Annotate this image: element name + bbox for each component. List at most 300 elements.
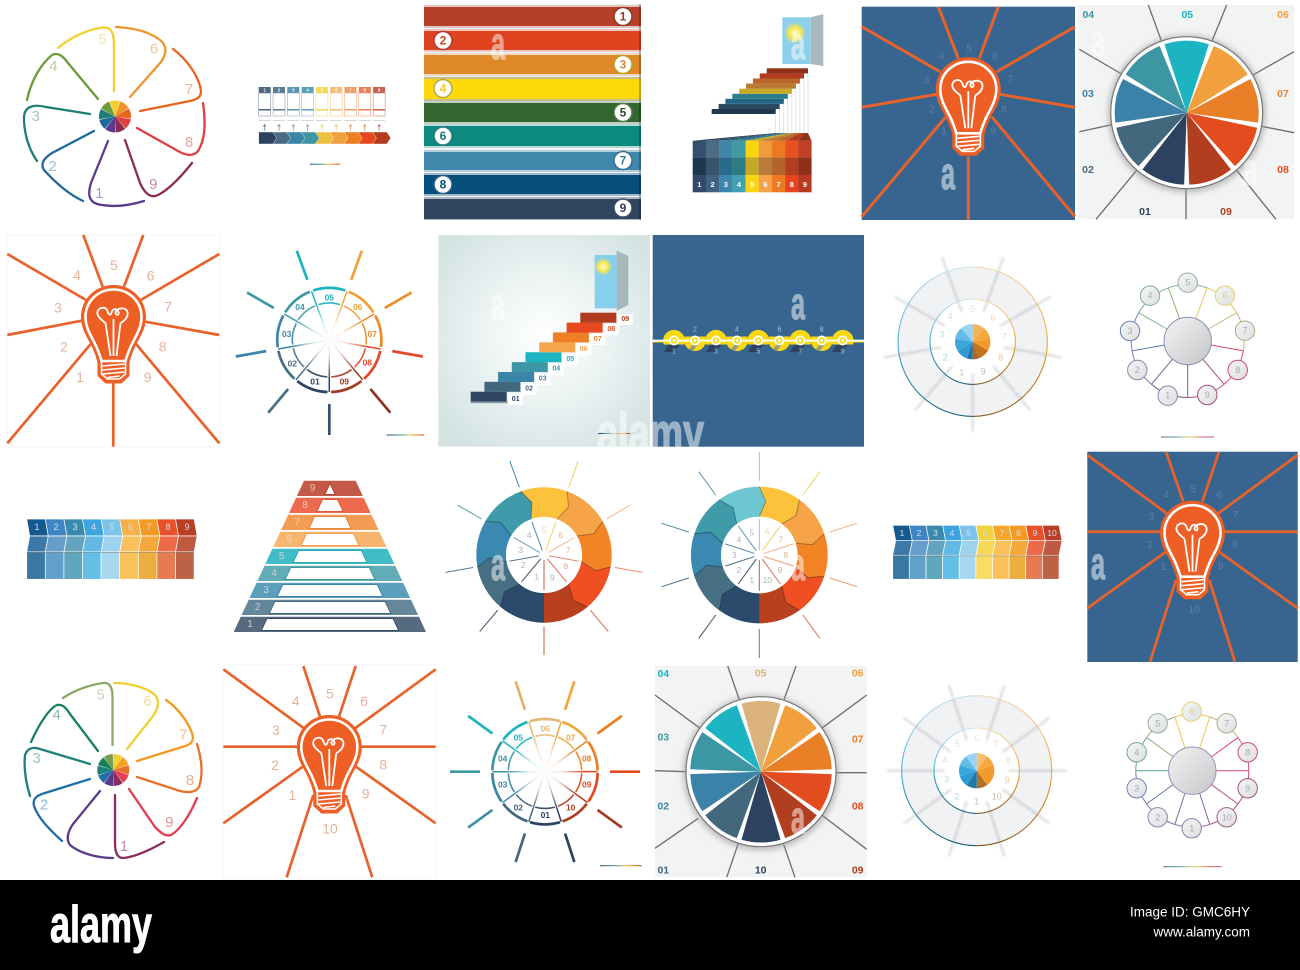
inner numbers: 4 — [527, 530, 532, 540]
ray numbers: 4 — [292, 693, 300, 709]
tab numbers: 6 — [335, 88, 338, 92]
panel: concentric circles with ten sections — [887, 685, 1067, 856]
header tabs — [259, 87, 385, 93]
section numbers: 7 — [993, 739, 999, 749]
spokes — [1133, 288, 1243, 397]
step label plates and numbers: 02 — [525, 386, 533, 392]
ray numbers: 5 — [1191, 484, 1197, 496]
layer numbers — [247, 483, 316, 630]
petal numbers: 9 — [165, 814, 173, 831]
inner numbers: 8 — [563, 561, 568, 571]
node numbers: 7 — [1224, 718, 1229, 728]
node numbers: 5 — [1185, 278, 1190, 288]
bead numbers: 5 — [756, 348, 760, 356]
petal outlines — [25, 683, 201, 858]
column numbers: 9 — [184, 522, 190, 532]
sector arcs — [275, 288, 383, 395]
ray numbers: 10 — [1188, 604, 1200, 616]
step label plates and numbers: 06 — [580, 346, 588, 353]
corner labels: 07 — [1277, 88, 1289, 100]
corner labels: 01 — [657, 865, 669, 877]
step label plates and numbers: 04 — [552, 366, 560, 372]
petal outlines — [24, 27, 205, 206]
corner labels — [657, 667, 864, 877]
inner white disc — [506, 517, 582, 593]
ring arcs — [1113, 692, 1271, 850]
panel: blue background with beaded timeline — [653, 235, 864, 447]
number badges — [434, 8, 632, 217]
watermark letters: a — [791, 18, 806, 69]
corner labels: 03 — [1082, 88, 1094, 100]
bead discs — [663, 330, 854, 351]
inner numbers — [732, 527, 788, 585]
tab numbers: 8 — [364, 88, 367, 92]
petal numbers: 4 — [49, 58, 57, 75]
pale radial background — [438, 235, 650, 447]
inner numbers: 5 — [749, 528, 754, 538]
ring outlines — [898, 267, 1047, 416]
sun — [594, 258, 612, 276]
tab numbers: 7 — [349, 88, 352, 92]
block numbers: 4 — [737, 180, 742, 189]
watermark letters: a — [1091, 538, 1106, 589]
legend line — [387, 434, 424, 436]
block numbers: 5 — [750, 180, 754, 189]
panel: pyramid with nine layers — [234, 481, 426, 632]
sector labels: 02 — [288, 358, 297, 368]
node numbers: 5 — [1155, 718, 1160, 728]
node numbers: 10 — [1222, 812, 1232, 822]
section numbers: 6 — [990, 312, 996, 322]
sector labels: 05 — [514, 732, 523, 742]
inner numbers: 4 — [737, 534, 742, 544]
ray numbers: 6 — [1217, 490, 1223, 501]
ray numbers: 8 — [1232, 540, 1238, 551]
badge numbers: 4 — [440, 82, 447, 96]
ray numbers: 8 — [1001, 104, 1007, 116]
corner labels: 08 — [1277, 164, 1289, 176]
hanging stair treads — [712, 68, 808, 133]
node numbers: 4 — [1147, 291, 1153, 301]
section numbers: 5 — [955, 738, 960, 748]
step label plates and numbers: 01 — [512, 396, 520, 403]
petal numbers: 7 — [185, 81, 193, 98]
panel: light bulb on white, ten rays — [223, 665, 436, 878]
section numbers: 2 — [954, 792, 959, 802]
inner numbers: 10 — [763, 575, 772, 585]
sector labels: 03 — [498, 779, 508, 789]
pale background — [1078, 5, 1294, 219]
ray numbers: 2 — [929, 104, 935, 116]
inner numbers: 9 — [550, 572, 555, 582]
column numbers: 10 — [1047, 528, 1057, 538]
panel: light bulb on blue, nine rays — [862, 7, 1075, 220]
panel: spoke diagram with ten sectors — [450, 681, 642, 866]
panel: pie chart with ten wedges — [655, 666, 867, 877]
sector labels: 02 — [514, 802, 523, 812]
sector labels: 10 — [566, 802, 576, 812]
grey ring band — [918, 712, 1035, 829]
middle row — [893, 541, 1062, 555]
stair steps — [471, 313, 616, 403]
section numbers: 9 — [1005, 775, 1010, 785]
layer numbers: 5 — [279, 551, 285, 562]
corner labels: 03 — [657, 732, 669, 744]
door leaf — [617, 251, 628, 311]
panel: small arrow timeline — [259, 87, 391, 165]
sector labels: 07 — [368, 329, 377, 339]
step label plates and numbers: 05 — [566, 356, 574, 363]
panel: spoke diagram with nine sectors — [236, 251, 424, 436]
sector labels — [498, 723, 592, 820]
layer numbers: 8 — [302, 500, 308, 511]
bead numbers: 7 — [798, 348, 802, 356]
ray numbers: 2 — [1147, 540, 1153, 551]
panel: pie chart with nine wedges — [1078, 5, 1294, 219]
inner numbers: 6 — [558, 530, 563, 540]
petal numbers: 5 — [97, 686, 105, 704]
column numbers: 8 — [1016, 528, 1021, 538]
petal numbers: 7 — [179, 726, 187, 744]
inner numbers: 3 — [732, 550, 737, 560]
blue background — [862, 7, 1075, 220]
corner labels: 08 — [852, 801, 864, 813]
column outlines — [259, 93, 385, 131]
block numbers — [697, 180, 807, 189]
panel: segmented ring with nine blocks — [446, 461, 642, 655]
ray numbers: 8 — [159, 339, 167, 355]
inner numbers: 5 — [542, 525, 547, 535]
watermark letters: a — [791, 792, 806, 843]
watermark letters: a — [491, 539, 506, 590]
sector labels: 01 — [310, 377, 320, 387]
section numbers — [942, 733, 1011, 807]
sector labels: 09 — [340, 377, 349, 387]
ray numbers: 1 — [76, 369, 84, 385]
image id: Image ID: GMC6HY — [1130, 904, 1250, 920]
node numbers: 9 — [1245, 783, 1250, 793]
column numbers: 1 — [900, 528, 905, 538]
inner white disc — [721, 517, 798, 593]
ray numbers: 3 — [1149, 512, 1155, 523]
column numbers: 5 — [109, 522, 115, 532]
top row — [893, 525, 1062, 541]
tab numbers: 4 — [306, 88, 309, 92]
ray numbers — [54, 257, 172, 385]
corner labels: 09 — [1220, 206, 1232, 218]
frame — [7, 235, 220, 447]
panel: ring of nine numbered nodes — [1108, 261, 1267, 438]
watermark letters: a — [491, 18, 506, 69]
petal numbers: 5 — [99, 31, 107, 48]
ray numbers: 2 — [60, 339, 68, 355]
bead numbers: 4 — [735, 326, 739, 334]
block numbers: 9 — [803, 180, 807, 189]
ray numbers: 9 — [1218, 561, 1224, 572]
section numbers: 10 — [992, 792, 1002, 802]
inner numbers: 8 — [783, 550, 788, 560]
panel: folded colour strip with nine columns — [27, 519, 197, 579]
sector arcs — [490, 719, 600, 824]
door sky — [782, 17, 811, 64]
tab numbers: 9 — [378, 88, 381, 92]
ray numbers: 4 — [939, 52, 945, 62]
inner numbers — [518, 525, 571, 582]
ray numbers: 8 — [379, 756, 387, 772]
layer numbers: 1 — [247, 619, 253, 630]
icon: light bulb — [81, 285, 146, 384]
layer bands — [234, 481, 426, 632]
spokes — [1136, 717, 1248, 824]
badge numbers: 5 — [620, 106, 627, 120]
colour block — [693, 133, 812, 192]
icon: light bulb — [936, 57, 1001, 156]
section numbers: 1 — [974, 797, 979, 807]
arrow chain — [259, 132, 391, 144]
sector labels: 06 — [353, 302, 363, 312]
outer rays — [661, 452, 857, 658]
ray numbers: 9 — [362, 785, 370, 801]
petal numbers: 9 — [149, 176, 157, 193]
node numbers: 2 — [1155, 812, 1160, 822]
pale background — [655, 666, 867, 877]
divider rays — [655, 666, 867, 877]
bead centres — [669, 336, 848, 346]
tab numbers: 3 — [292, 88, 295, 92]
website: www.alamy.com — [1152, 924, 1250, 940]
corner labels: 06 — [1277, 9, 1289, 21]
watermark letters: a — [791, 539, 806, 590]
blue background — [653, 235, 864, 447]
inner numbers: 1 — [534, 572, 539, 582]
sector labels: 07 — [566, 732, 576, 742]
top row — [27, 519, 197, 536]
corner labels: 05 — [755, 667, 767, 679]
sun — [784, 22, 806, 44]
panel: light bulb on white, nine rays — [7, 235, 220, 447]
bottom row — [27, 552, 194, 579]
center pie — [960, 329, 985, 354]
petal numbers: 3 — [33, 750, 41, 767]
ray numbers — [1147, 484, 1239, 616]
section numbers — [939, 304, 1007, 377]
panel: staircase on pale background — [438, 235, 650, 447]
layer numbers: 3 — [263, 585, 269, 596]
bottom row — [893, 555, 1059, 579]
ray numbers: 3 — [54, 300, 62, 316]
wedges — [688, 701, 834, 842]
icon: light bulb — [1160, 501, 1225, 599]
column numbers: 2 — [53, 522, 59, 532]
column numbers: 1 — [34, 522, 40, 532]
petal numbers: 6 — [150, 40, 158, 58]
column numbers: 3 — [933, 528, 938, 538]
legend line — [1163, 866, 1222, 867]
bead numbers: 1 — [672, 348, 676, 356]
badge numbers: 3 — [620, 58, 627, 72]
layer numbers: 9 — [310, 483, 316, 494]
legend line — [600, 865, 642, 866]
inner numbers: 3 — [518, 545, 523, 555]
inner spokes — [725, 519, 794, 591]
divider rays — [1079, 5, 1294, 219]
panel: stacked numbered banners — [424, 4, 641, 220]
watermark letters: alamy — [597, 401, 704, 464]
inner numbers: 1 — [749, 575, 754, 585]
petal numbers: 8 — [186, 772, 194, 789]
inner numbers: 2 — [737, 565, 742, 575]
ring blocks — [473, 487, 615, 627]
section numbers: 4 — [947, 311, 953, 321]
sector labels: 04 — [295, 302, 305, 312]
sector labels: 06 — [541, 723, 550, 733]
ray numbers: 1 — [288, 787, 296, 803]
corner labels: 06 — [852, 667, 864, 679]
column numbers — [34, 522, 190, 532]
icon: light bulb — [297, 715, 362, 814]
grey bead stems — [689, 344, 825, 351]
sector labels: 05 — [325, 293, 334, 303]
section numbers: 3 — [939, 329, 944, 339]
sector labels: 09 — [582, 779, 592, 789]
petal numbers: 2 — [40, 796, 48, 814]
node numbers — [1127, 278, 1248, 401]
inner numbers: 7 — [778, 534, 783, 544]
watermark letters: a — [1243, 144, 1258, 195]
section numbers: 8 — [998, 352, 1003, 362]
column numbers: 4 — [950, 528, 955, 538]
door sky — [595, 255, 617, 308]
section numbers: 9 — [981, 367, 986, 377]
petal numbers: 8 — [185, 134, 193, 151]
blurred dividers — [887, 685, 1067, 856]
outer dashes — [236, 251, 423, 435]
section numbers: 3 — [944, 774, 949, 784]
node numbers: 8 — [1245, 747, 1250, 757]
column numbers: 9 — [1033, 528, 1038, 538]
rays — [1087, 452, 1298, 662]
block numbers: 8 — [790, 180, 794, 189]
sector labels — [282, 293, 377, 387]
ray numbers — [271, 685, 387, 836]
node numbers: 4 — [1134, 747, 1139, 757]
node numbers: 8 — [1235, 365, 1240, 375]
node numbers: 6 — [1222, 291, 1228, 301]
column numbers: 7 — [146, 522, 152, 532]
ray numbers: 1 — [1161, 562, 1167, 573]
banner bars — [424, 4, 641, 220]
bead numbers: 8 — [820, 326, 824, 334]
watermark letters — [491, 16, 1258, 843]
column numbers: 4 — [91, 522, 96, 532]
ray numbers: 9 — [144, 369, 152, 385]
center pie — [964, 758, 989, 783]
column numbers: 8 — [165, 522, 171, 532]
nodes with numbers — [1120, 273, 1255, 405]
ray numbers: 7 — [379, 721, 387, 737]
ray numbers: 5 — [966, 44, 972, 54]
rays — [7, 235, 219, 447]
panel: stairs to door with colour block — [693, 14, 823, 192]
layer numbers: 7 — [295, 517, 301, 528]
column numbers: 6 — [128, 522, 133, 532]
bead numbers: 6 — [777, 326, 781, 334]
tab numbers — [263, 88, 381, 92]
corner labels — [1082, 9, 1289, 218]
nodes — [1127, 702, 1257, 838]
step label plates and numbers: 03 — [539, 376, 547, 382]
ray numbers: 1 — [941, 126, 947, 138]
banner backdrop — [424, 4, 641, 220]
node numbers: 6 — [1189, 707, 1194, 717]
panel: segmented ring with ten blocks — [661, 452, 857, 658]
corner labels: 04 — [657, 668, 669, 680]
footer bar — [0, 880, 1300, 970]
watermark letters: a — [791, 278, 806, 329]
ray numbers: 7 — [1233, 510, 1239, 521]
node numbers: 3 — [1127, 326, 1133, 336]
sector labels: 08 — [582, 753, 592, 763]
center colour wheel — [104, 105, 126, 128]
layer numbers: 6 — [287, 534, 293, 545]
section numbers: 6 — [974, 733, 979, 743]
frame — [223, 665, 436, 878]
door leaf — [811, 14, 823, 66]
section numbers: 4 — [942, 755, 948, 765]
ray numbers: 7 — [164, 299, 172, 315]
watermark letters: a — [1091, 16, 1106, 67]
ray numbers: 5 — [110, 257, 118, 273]
section numbers: 8 — [1006, 756, 1011, 766]
rays — [862, 7, 1075, 220]
node numbers: 2 — [1135, 365, 1140, 375]
ray numbers: 4 — [73, 267, 81, 283]
outer rays — [446, 461, 642, 655]
bead numbers — [672, 326, 845, 356]
alamy logo text: alamy — [50, 896, 152, 954]
sector labels: 08 — [363, 357, 372, 367]
column numbers: 7 — [1000, 528, 1005, 538]
ray numbers: 9 — [990, 126, 996, 138]
node numbers: 1 — [1189, 823, 1194, 833]
legend line — [1161, 436, 1214, 438]
legend line — [598, 433, 630, 434]
corner labels: 09 — [852, 865, 864, 877]
node numbers: 7 — [1242, 326, 1248, 336]
badge numbers: 2 — [440, 34, 447, 48]
corner labels: 10 — [755, 865, 767, 877]
ray numbers — [924, 44, 1013, 138]
badge numbers: 6 — [440, 129, 447, 143]
node numbers: 9 — [1205, 390, 1210, 400]
ring outlines — [902, 696, 1052, 846]
ray numbers: 6 — [147, 268, 155, 284]
column numbers: 2 — [917, 528, 922, 538]
legend line — [310, 164, 340, 165]
petal numbers: 3 — [32, 108, 40, 125]
ring blocks — [691, 483, 828, 627]
bead numbers: 2 — [693, 326, 697, 334]
petal numbers — [32, 31, 193, 202]
corner labels: 02 — [657, 801, 669, 813]
inner numbers: 9 — [778, 565, 783, 575]
central disc — [1169, 747, 1216, 794]
rim — [1108, 35, 1266, 193]
corner labels: 04 — [1082, 9, 1094, 21]
section numbers: 1 — [959, 367, 964, 377]
ray numbers: 2 — [271, 757, 279, 773]
watermark letters: a — [941, 148, 956, 199]
